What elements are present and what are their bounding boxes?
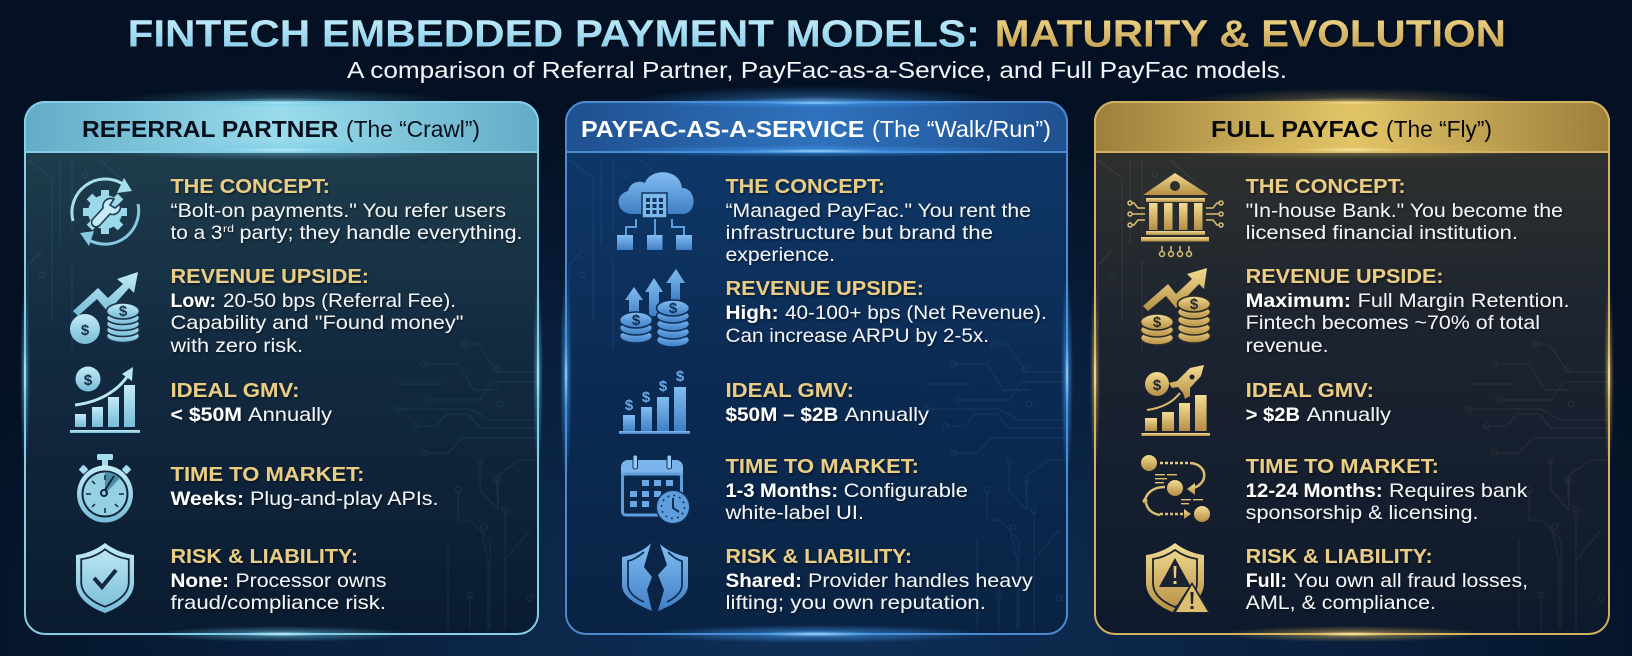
text block: payfac revenue: REVENUE UPSIDE: <box>726 277 924 300</box>
panel header: referral partner: REFERRAL PARTNER <box>82 116 339 142</box>
text block: full payfac concept: licensed financial institution. <box>1246 222 1518 244</box>
icon: bars with dollar signs: $ <box>642 389 651 406</box>
text block: full payfac risk: AML, & compliance. <box>1246 592 1436 614</box>
title: FINTECH EMBEDDED PAYMENT MODELS: <box>128 14 980 56</box>
text block: referral partner time to market <box>170 463 438 510</box>
text block: full payfac time to market: sponsorship & licensing. <box>1246 502 1478 524</box>
text block: referral partner ideal gmv: < $50M <box>170 404 242 426</box>
icon: rising arrows and coins <box>620 269 690 347</box>
icon: growth bars with coin: $ <box>84 372 93 389</box>
icon: gear with wrench and cycle arrows <box>72 178 139 246</box>
text block: full payfac revenue: Maximum: <box>1246 290 1351 312</box>
text block: referral partner concept: to a 3 <box>170 222 222 244</box>
icon: rocket and growth bars: $ <box>1153 377 1162 394</box>
text block: payfac time to market <box>724 455 968 524</box>
text block: referral partner ideal gmv <box>170 379 332 426</box>
icon: bars with dollar signs <box>619 368 690 434</box>
text block: payfac ideal gmv: $50M – $2B <box>726 404 838 426</box>
text block: full payfac risk: RISK & LIABILITY: <box>1246 545 1433 568</box>
icon: shield with check <box>76 543 134 613</box>
text block: full payfac time to market: Requires bank <box>1389 480 1528 502</box>
text block: referral partner revenue: Capability and "Found money" <box>170 312 464 334</box>
text block: referral partner risk: None: <box>170 570 229 592</box>
text block: payfac concept: infrastructure but brand the <box>726 222 993 244</box>
panel header: payfac-as-a-service <box>566 98 1067 157</box>
text block: payfac concept: “Managed PayFac." You rent the <box>726 200 1031 222</box>
panel: full payfac <box>1090 88 1614 642</box>
panel header: full payfac: (The “Fly”) <box>1386 116 1492 142</box>
text block: referral partner time to market: Weeks: <box>170 488 244 510</box>
text block: payfac risk <box>726 545 1033 614</box>
text block: referral partner concept <box>170 175 522 244</box>
icon: shield with warning triangles <box>1146 543 1211 613</box>
text block: full payfac risk <box>1246 545 1528 614</box>
text block: payfac risk: RISK & LIABILITY: <box>726 545 912 568</box>
panel: payfac-as-a-service <box>560 86 1073 643</box>
icon: revenue arrow and gold coins <box>1140 268 1210 345</box>
icon: revenue arrow and coins: $ <box>119 303 128 320</box>
icon: revenue arrow and coins <box>70 272 140 344</box>
panel header: full payfac: FULL PAYFAC <box>1211 116 1379 142</box>
icon: bars with dollar signs: $ <box>659 378 668 395</box>
text block: payfac ideal gmv <box>726 379 929 426</box>
text block: payfac revenue: Can increase ARPU by 2-5x. <box>726 325 989 347</box>
icon: cloud network <box>617 172 694 250</box>
icon: process roadmap <box>1141 455 1210 522</box>
title <box>128 14 1506 56</box>
text block: referral partner concept: party; they handle everything. <box>240 222 522 244</box>
text block: referral partner concept: rd <box>223 223 234 235</box>
text block: referral partner risk: fraud/compliance risk. <box>170 592 386 614</box>
panel header: payfac-as-a-service: PAYFAC-AS-A-SERVICE <box>581 116 864 142</box>
text block: full payfac revenue: Fintech becomes ~70% of total <box>1246 312 1540 334</box>
icon: rocket and growth bars <box>1142 365 1210 436</box>
text block: payfac concept <box>726 175 1031 266</box>
text block: referral partner revenue: Low: <box>170 290 216 312</box>
text block: referral partner ideal gmv: Annually <box>248 404 332 426</box>
text block: referral partner ideal gmv: IDEAL GMV: <box>170 379 300 402</box>
subtitle: A comparison of Referral Partner, PayFac-as-a-Service, and Full PayFac models. <box>347 57 1287 83</box>
text block: full payfac revenue: Full Margin Retention. <box>1358 290 1570 312</box>
icon: bank with circuits <box>1128 173 1223 256</box>
text block: full payfac time to market: TIME TO MARKET: <box>1246 455 1439 478</box>
text block: full payfac ideal gmv <box>1246 379 1391 426</box>
text block: full payfac concept: THE CONCEPT: <box>1246 175 1406 198</box>
text block: payfac revenue: 40-100+ bps (Net Revenue). <box>785 302 1047 324</box>
icon: bars with dollar signs: $ <box>625 397 634 414</box>
text block: payfac concept: experience. <box>726 244 835 266</box>
icon: revenue arrow and coins: $ <box>81 322 90 339</box>
text block: full payfac ideal gmv: > $2B <box>1246 404 1300 426</box>
text block: referral partner revenue: with zero risk. <box>169 335 303 357</box>
text block: payfac revenue: High: <box>726 302 778 324</box>
panel header: payfac-as-a-service: (The “Walk/Run”) <box>872 116 1051 142</box>
text block: full payfac concept: "In-house Bank." You become the <box>1246 200 1563 222</box>
text block: payfac concept: THE CONCEPT: <box>726 175 885 198</box>
icon: rising arrows and coins: $ <box>632 312 641 329</box>
text block: full payfac risk: Full: <box>1246 570 1287 592</box>
text block: referral partner risk <box>170 545 387 614</box>
text block: referral partner concept: THE CONCEPT: <box>170 175 330 198</box>
icon: calendar with clock <box>621 455 690 524</box>
text block: payfac risk: lifting; you own reputation. <box>726 592 986 614</box>
text block: payfac time to market: TIME TO MARKET: <box>726 455 919 478</box>
text block: referral partner revenue <box>169 265 464 357</box>
text block: payfac ideal gmv: IDEAL GMV: <box>726 379 854 402</box>
panel: referral partner <box>20 88 543 642</box>
icon: bars with dollar signs: $ <box>676 368 685 385</box>
text block: payfac time to market: 1-3 Months: <box>726 480 838 502</box>
text block: referral partner time to market: Plug-and-play APIs. <box>250 488 438 510</box>
text block: full payfac revenue <box>1246 265 1570 357</box>
text block: referral partner revenue: REVENUE UPSIDE: <box>170 265 369 288</box>
icon: revenue arrow and gold coins: $ <box>1153 314 1162 331</box>
panel header: full payfac <box>1095 98 1609 159</box>
text block: full payfac concept <box>1246 175 1563 244</box>
title: MATURITY & EVOLUTION <box>995 14 1506 56</box>
text block: referral partner concept: “Bolt-on payments." You refer users <box>170 200 506 222</box>
text block: full payfac revenue: revenue. <box>1246 335 1328 357</box>
text block: payfac ideal gmv: Annually <box>845 404 929 426</box>
text block: referral partner risk: RISK & LIABILITY: <box>170 545 358 568</box>
text block: payfac risk: Shared: <box>726 570 802 592</box>
text block: full payfac time to market <box>1246 455 1528 524</box>
text block: referral partner risk: Processor owns <box>236 570 387 592</box>
text block: payfac time to market: Configurable <box>844 480 968 502</box>
text block: full payfac ideal gmv: Annually <box>1307 404 1391 426</box>
text block: full payfac time to market: 12-24 Months: <box>1246 480 1383 502</box>
panel header: referral partner <box>25 98 538 160</box>
text block: full payfac risk: You own all fraud losses, <box>1294 570 1528 592</box>
text block: referral partner revenue: 20-50 bps (Referral Fee). <box>223 290 456 312</box>
text block: referral partner time to market: TIME TO MARKET: <box>170 463 364 486</box>
panel header: referral partner: (The “Crawl”) <box>346 116 480 142</box>
icon: growth bars with coin <box>70 366 140 433</box>
text block: full payfac revenue: REVENUE UPSIDE: <box>1246 265 1444 288</box>
icon: stopwatch <box>77 454 133 522</box>
text block: full payfac ideal gmv: IDEAL GMV: <box>1246 379 1374 402</box>
text block: payfac time to market: white-label UI. <box>724 502 864 524</box>
text block: payfac revenue <box>726 277 1047 347</box>
icon: cracked shield <box>622 543 688 611</box>
icon: rising arrows and coins: $ <box>669 300 678 317</box>
icon: revenue arrow and gold coins: $ <box>1190 296 1199 313</box>
text block: payfac risk: Provider handles heavy <box>808 570 1033 592</box>
